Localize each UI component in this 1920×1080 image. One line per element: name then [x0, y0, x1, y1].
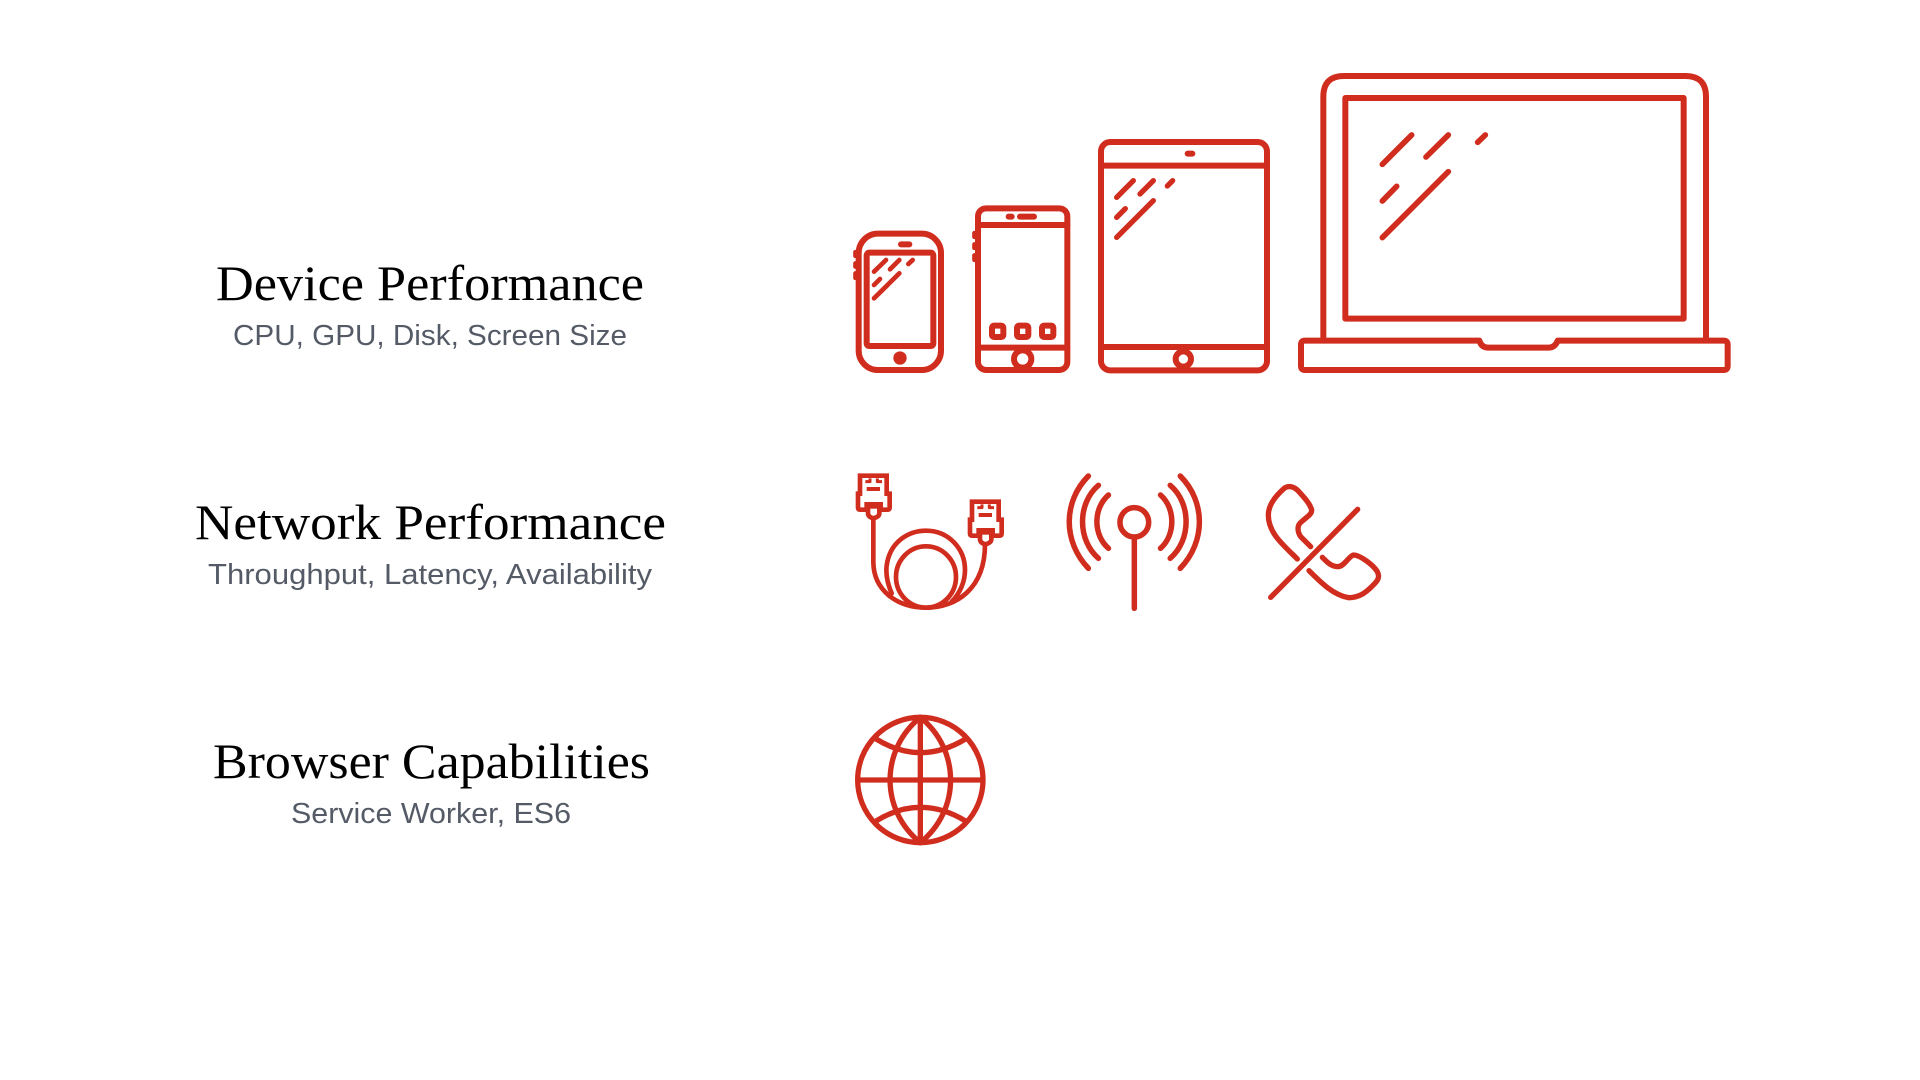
subtitle: device factors: CPU, GPU, Disk, Screen Size [233, 320, 627, 352]
icon: small smartphone [855, 234, 941, 370]
icon: crossed-out phone handset [1268, 487, 1379, 598]
icon: tablet [1101, 142, 1267, 370]
icon: globe [858, 717, 983, 843]
icon: smartphone with apps [974, 208, 1067, 370]
heading: Network Performance: Network Performance [195, 494, 666, 550]
subtitle: network factors: Throughput, Latency, Availability [208, 559, 653, 591]
icon: ethernet cable [858, 476, 1002, 608]
icon: radio antenna [1069, 476, 1199, 608]
icon: laptop [1301, 76, 1728, 370]
heading: Device Performance: Device Performance [216, 255, 644, 311]
subtitle: browser factors: Service Worker, ES6 [291, 798, 571, 830]
heading: Browser Capabilities: Browser Capabilities [213, 733, 650, 789]
